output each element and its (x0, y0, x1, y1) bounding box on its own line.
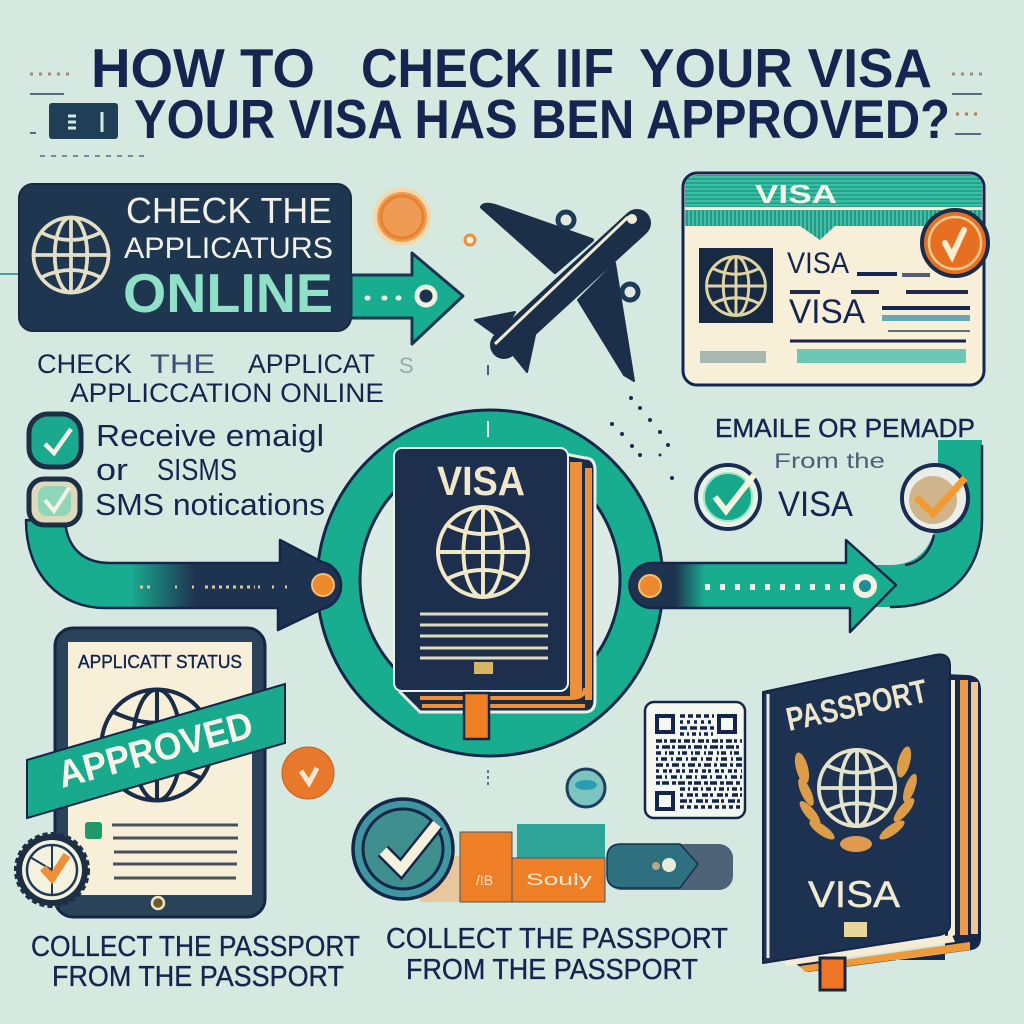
panel: visa card: VISA (787, 247, 849, 280)
icon: check one (29, 414, 81, 467)
text: check the application online: S (399, 353, 414, 378)
icon: laurel (792, 745, 920, 852)
text: collect right (386, 923, 728, 986)
icon: orange and teal boxes: /IB (476, 872, 493, 888)
text: check the application online (37, 349, 414, 408)
panel: check the application online (0, 184, 351, 331)
title: HOW TO (91, 37, 315, 99)
arrow: center to right (630, 440, 982, 632)
checklist: receive notifications (29, 414, 325, 525)
icon: approval badge (922, 210, 988, 276)
panel: visa card: VISA (755, 179, 837, 209)
text: check the application online: CHECK (37, 349, 132, 379)
icon: check two (29, 479, 80, 525)
icon: orange and teal boxes: Souly (526, 870, 593, 889)
icon: large check (353, 799, 453, 899)
checklist: receive notifications: Receive emaigl (96, 418, 324, 453)
title decoration (30, 74, 988, 156)
icon: orange coin (375, 190, 429, 244)
icon: orange small check (282, 747, 334, 799)
text: collect right: FROM THE PASSPORT (406, 954, 698, 986)
panel: check the application online: ONLINE (123, 262, 333, 324)
icon: large passport: PASSPORT (783, 672, 930, 738)
ribbon: approved (27, 684, 285, 818)
text: collect left: FROM THE PASSPORT (52, 961, 344, 993)
checklist: receive notifications: SMS notications (95, 487, 325, 522)
text: collect right: COLLECT THE PASSPORT (386, 923, 728, 955)
text: email or passport: EMAILE OR PEMADP (715, 413, 975, 443)
text: email or passport: From the (774, 450, 885, 473)
text: collect left (31, 931, 360, 993)
arrow: from panel to plane (351, 253, 463, 344)
ribbon: approved: APPROVED (53, 704, 258, 797)
icon: seal check (16, 834, 88, 906)
title (49, 37, 950, 150)
arrow: left teal to center (26, 520, 341, 630)
icon: dark card reader (607, 844, 733, 890)
icon: central visa passport (394, 448, 595, 739)
text: check the application online: APPLICCATION ONLINE (70, 378, 384, 408)
icon: orange and teal boxes (420, 824, 605, 902)
text: check the application online: THE (150, 349, 215, 379)
checklist: receive notifications: SISMS (157, 452, 237, 487)
icon: globe (34, 218, 108, 292)
panel: application status tablet: APPLICATT STATUS (78, 652, 242, 672)
title: CHECK IIF (361, 37, 614, 99)
panel: check the application online: CHECK THE (126, 190, 332, 231)
panel: application status tablet (27, 628, 285, 917)
icon: teal check (696, 465, 760, 529)
panel: visa card (683, 173, 988, 385)
icon: airplane (475, 205, 638, 381)
ring around passport (317, 410, 663, 756)
text: email or passport: VISA (778, 485, 854, 524)
panel: check the application online: APPLICATURS (124, 232, 333, 265)
icon: teal small circle (567, 769, 605, 807)
trail dots (488, 365, 674, 788)
panel: visa card: VISA (789, 293, 865, 331)
icon: globe tile (699, 248, 773, 323)
icon: large passport: VISA (808, 874, 900, 915)
checklist: receive notifications: or (96, 452, 128, 487)
text: email or passport (715, 413, 975, 524)
icon: orange check (902, 465, 968, 531)
icon: title tag (49, 103, 118, 139)
icon: QR code (645, 702, 745, 818)
icon: orange ring (465, 235, 475, 245)
icon: central visa passport: VISA (437, 458, 525, 504)
text: collect left: COLLECT THE PASSPORT (31, 931, 360, 963)
title: YOUR VISA (639, 37, 932, 99)
icon: large passport (763, 654, 981, 990)
text: check the application online: APPLICAT (248, 349, 375, 379)
